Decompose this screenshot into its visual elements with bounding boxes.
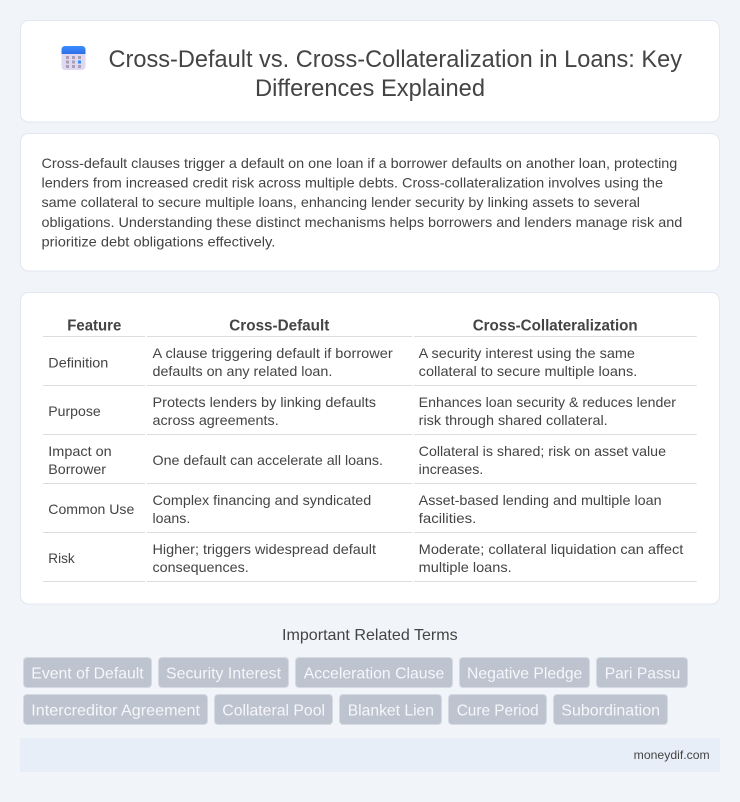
table row: impact on borrower: Impact on <box>48 443 112 459</box>
table row: common use: Common Use <box>48 501 135 517</box>
tag: collateral pool <box>214 694 332 724</box>
table row: common use: loans. <box>152 510 190 526</box>
table row: definition <box>43 345 697 386</box>
tag: security interest: Security Interest <box>166 666 282 683</box>
table row: risk: Risk <box>48 550 76 566</box>
text block: introduction paragraph: prioritize debt obligations effectively. <box>42 233 275 249</box>
tag: pari passu <box>596 658 688 688</box>
tag: security interest <box>158 658 288 688</box>
heading: important related terms: Important Related Terms <box>282 627 458 644</box>
tag: acceleration clause <box>296 658 452 688</box>
table row: definition: collateral to secure multiple loans. <box>419 363 637 379</box>
table row: risk: Moderate; collateral liquidation can affect <box>419 541 683 557</box>
table row: common use: Complex financing and syndicated <box>152 492 371 508</box>
tag: cure period <box>448 694 546 724</box>
tag: intercreditor agreement <box>24 694 208 724</box>
table header: Feature <box>67 318 121 335</box>
table row: purpose: across agreements. <box>152 412 279 428</box>
tag: event of default: Event of Default <box>31 666 144 683</box>
table row: impact on borrower <box>43 443 697 484</box>
tag: event of default <box>24 658 152 688</box>
table header <box>43 318 697 337</box>
table row: purpose: Enhances loan security & reduces lender <box>419 394 676 410</box>
panel: introduction <box>20 134 720 271</box>
icon: calendar <box>62 46 86 70</box>
text block: introduction paragraph: same collateral to secure multiple loans, enhancing lender security by linking assets to several <box>42 194 640 210</box>
table row: impact on borrower: increases. <box>419 461 483 477</box>
tag: blanket lien <box>340 694 442 724</box>
tag: subordination: Subordination <box>561 703 660 720</box>
table row: common use: facilities. <box>419 510 476 526</box>
table row: common use <box>43 492 697 533</box>
text block: introduction paragraph: obligations. Understanding these distinct mechanisms helps borrowers and lenders manage risk and <box>42 214 682 230</box>
tag: pari passu: Pari Passu <box>605 666 680 683</box>
table row: impact on borrower: One default can accelerate all loans. <box>152 452 383 468</box>
footer source text: moneydif.com <box>634 748 710 762</box>
tag: negative pledge: Negative Pledge <box>467 666 582 683</box>
table row: purpose <box>43 394 697 435</box>
panel: comparison table <box>20 292 720 604</box>
tag: negative pledge <box>460 658 590 688</box>
tag: subordination <box>554 694 668 724</box>
title <box>108 46 682 102</box>
text block: introduction paragraph: lenders from increased credit risk across multiple debts. Cross-collateralization involves using the <box>42 175 663 191</box>
tag: cure period: Cure Period <box>457 703 539 720</box>
table row: risk <box>43 541 697 582</box>
table row: purpose: risk through shared collateral. <box>419 412 608 428</box>
table row: impact on borrower: Collateral is shared; risk on asset value <box>419 443 666 459</box>
panel: title card <box>20 20 720 122</box>
title: Cross-Default vs. Cross-Collateralization in Loans: Key <box>108 46 682 73</box>
table row: impact on borrower: Borrower <box>48 461 106 477</box>
table row: purpose: Protects lenders by linking defaults <box>152 394 376 410</box>
table row: definition: A clause triggering default if borrower <box>152 345 393 361</box>
table row: definition: A security interest using the same <box>419 345 635 361</box>
text block: introduction paragraph: Cross-default clauses trigger a default on one loan if a borrower defaults on another loan, protecting <box>42 155 677 171</box>
table row: risk: multiple loans. <box>419 559 512 575</box>
tag: blanket lien: Blanket Lien <box>348 703 434 720</box>
table row: common use: Asset-based lending and multiple loan <box>419 492 662 508</box>
table header: Cross-Default <box>229 318 330 335</box>
table row: purpose: Purpose <box>48 403 101 419</box>
tag: acceleration clause: Acceleration Clause <box>304 666 444 683</box>
table row: definition: Definition <box>48 354 108 370</box>
tag: collateral pool: Collateral Pool <box>222 703 325 720</box>
table row: definition: defaults on any related loan. <box>152 363 332 379</box>
table row: risk: consequences. <box>152 559 249 575</box>
tag: intercreditor agreement: Intercreditor Agreement <box>31 703 201 720</box>
table row: risk: Higher; triggers widespread default <box>152 541 376 557</box>
panel: related term tags <box>24 658 688 724</box>
footer band <box>20 738 720 772</box>
table header: Cross-Collateralization <box>473 318 638 335</box>
text block: introduction paragraph <box>42 155 682 249</box>
title: Differences Explained <box>255 75 485 102</box>
